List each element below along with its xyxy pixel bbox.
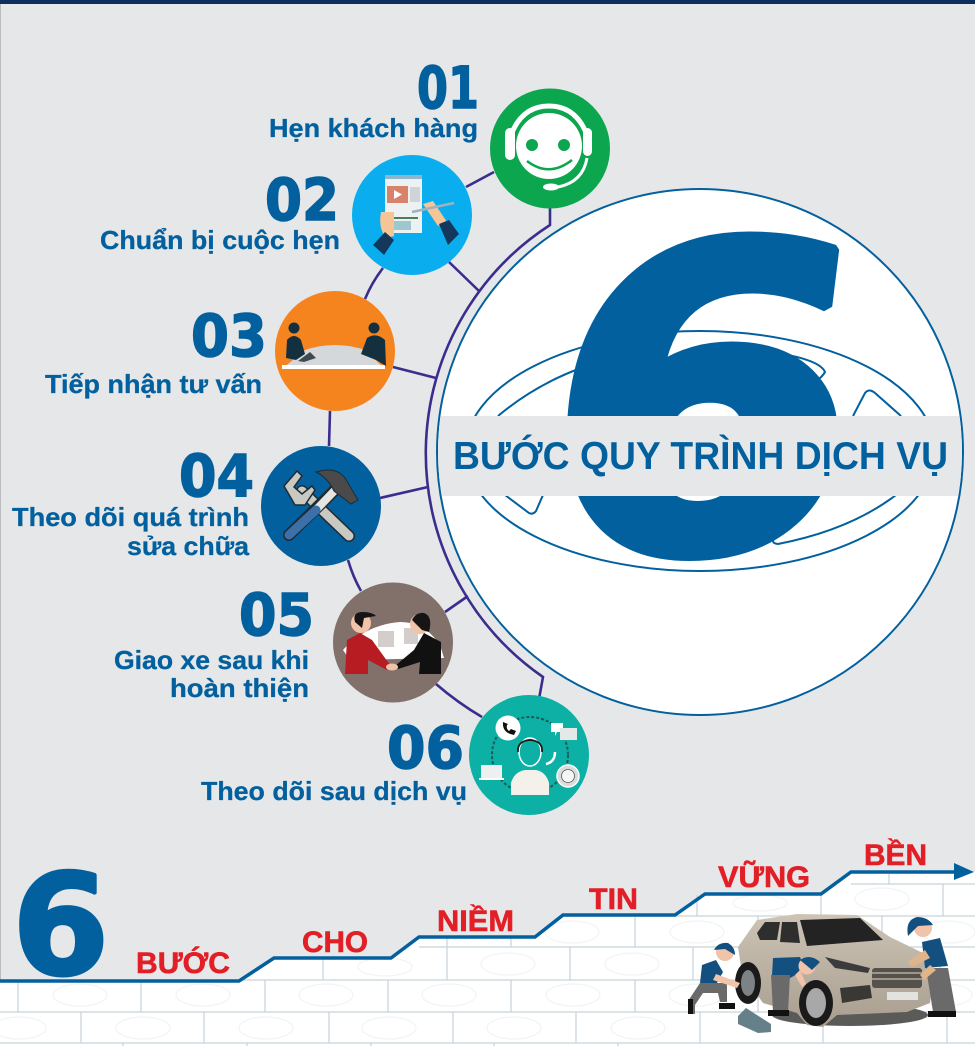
slogan words: NIỀM	[437, 904, 514, 938]
rising arrow line	[0, 863, 974, 981]
title band	[437, 416, 963, 496]
label: Giao xe sau khi	[114, 645, 309, 675]
step 1	[269, 54, 610, 208]
label: sửa chữa	[127, 531, 250, 561]
main circle	[437, 157, 963, 715]
mechanic centre	[768, 957, 820, 1016]
label: Tiếp nhận tư vấn	[45, 369, 262, 399]
step 4	[12, 442, 381, 566]
number 01: 01	[417, 54, 479, 122]
number 05: 05	[239, 581, 314, 649]
number 06: 06	[387, 714, 464, 782]
car with mechanics	[688, 914, 956, 1033]
number 02: 02	[265, 166, 339, 234]
icon: smiley headset	[490, 88, 610, 208]
big numeral 6: 6	[516, 157, 891, 650]
slogan words: BỀN	[864, 838, 927, 872]
icon: consultation	[275, 291, 395, 411]
label: hoàn thiện	[170, 673, 309, 703]
number 03: 03	[191, 302, 267, 370]
label: Theo dõi quá trình	[12, 502, 249, 532]
slogan words: VỮNG	[718, 860, 810, 894]
label: Chuẩn bị cuộc hẹn	[100, 225, 340, 255]
step 6	[201, 695, 589, 815]
icon: document and hands	[352, 155, 472, 275]
icon: handshake with car	[333, 582, 453, 702]
connector network	[329, 172, 550, 717]
step 2	[100, 155, 472, 275]
mechanic left	[688, 943, 740, 1014]
step 5	[114, 581, 453, 703]
label: Hẹn khách hàng	[269, 113, 478, 143]
icon: wrench and hammer	[261, 446, 381, 566]
label	[12, 502, 250, 561]
slogan words: CHO	[302, 926, 368, 959]
brick wall base	[0, 872, 975, 1046]
slogan words	[136, 838, 927, 980]
mechanic right	[907, 917, 956, 1017]
label: Theo dõi sau dịch vụ	[201, 776, 467, 806]
icon: customer support	[469, 695, 589, 815]
watermark logos	[0, 888, 975, 1039]
logo ellipse outline	[465, 331, 935, 571]
title text: BƯỚC QUY TRÌNH DỊCH VỤ	[453, 434, 948, 478]
small numeral 6: 6	[12, 845, 109, 1008]
slogan words: BƯỚC	[136, 946, 230, 980]
number 04: 04	[179, 442, 254, 510]
label	[114, 645, 309, 703]
toolbox	[738, 1008, 771, 1033]
car	[735, 914, 933, 1027]
step 3	[45, 291, 395, 411]
slogan words: TIN	[589, 883, 638, 916]
